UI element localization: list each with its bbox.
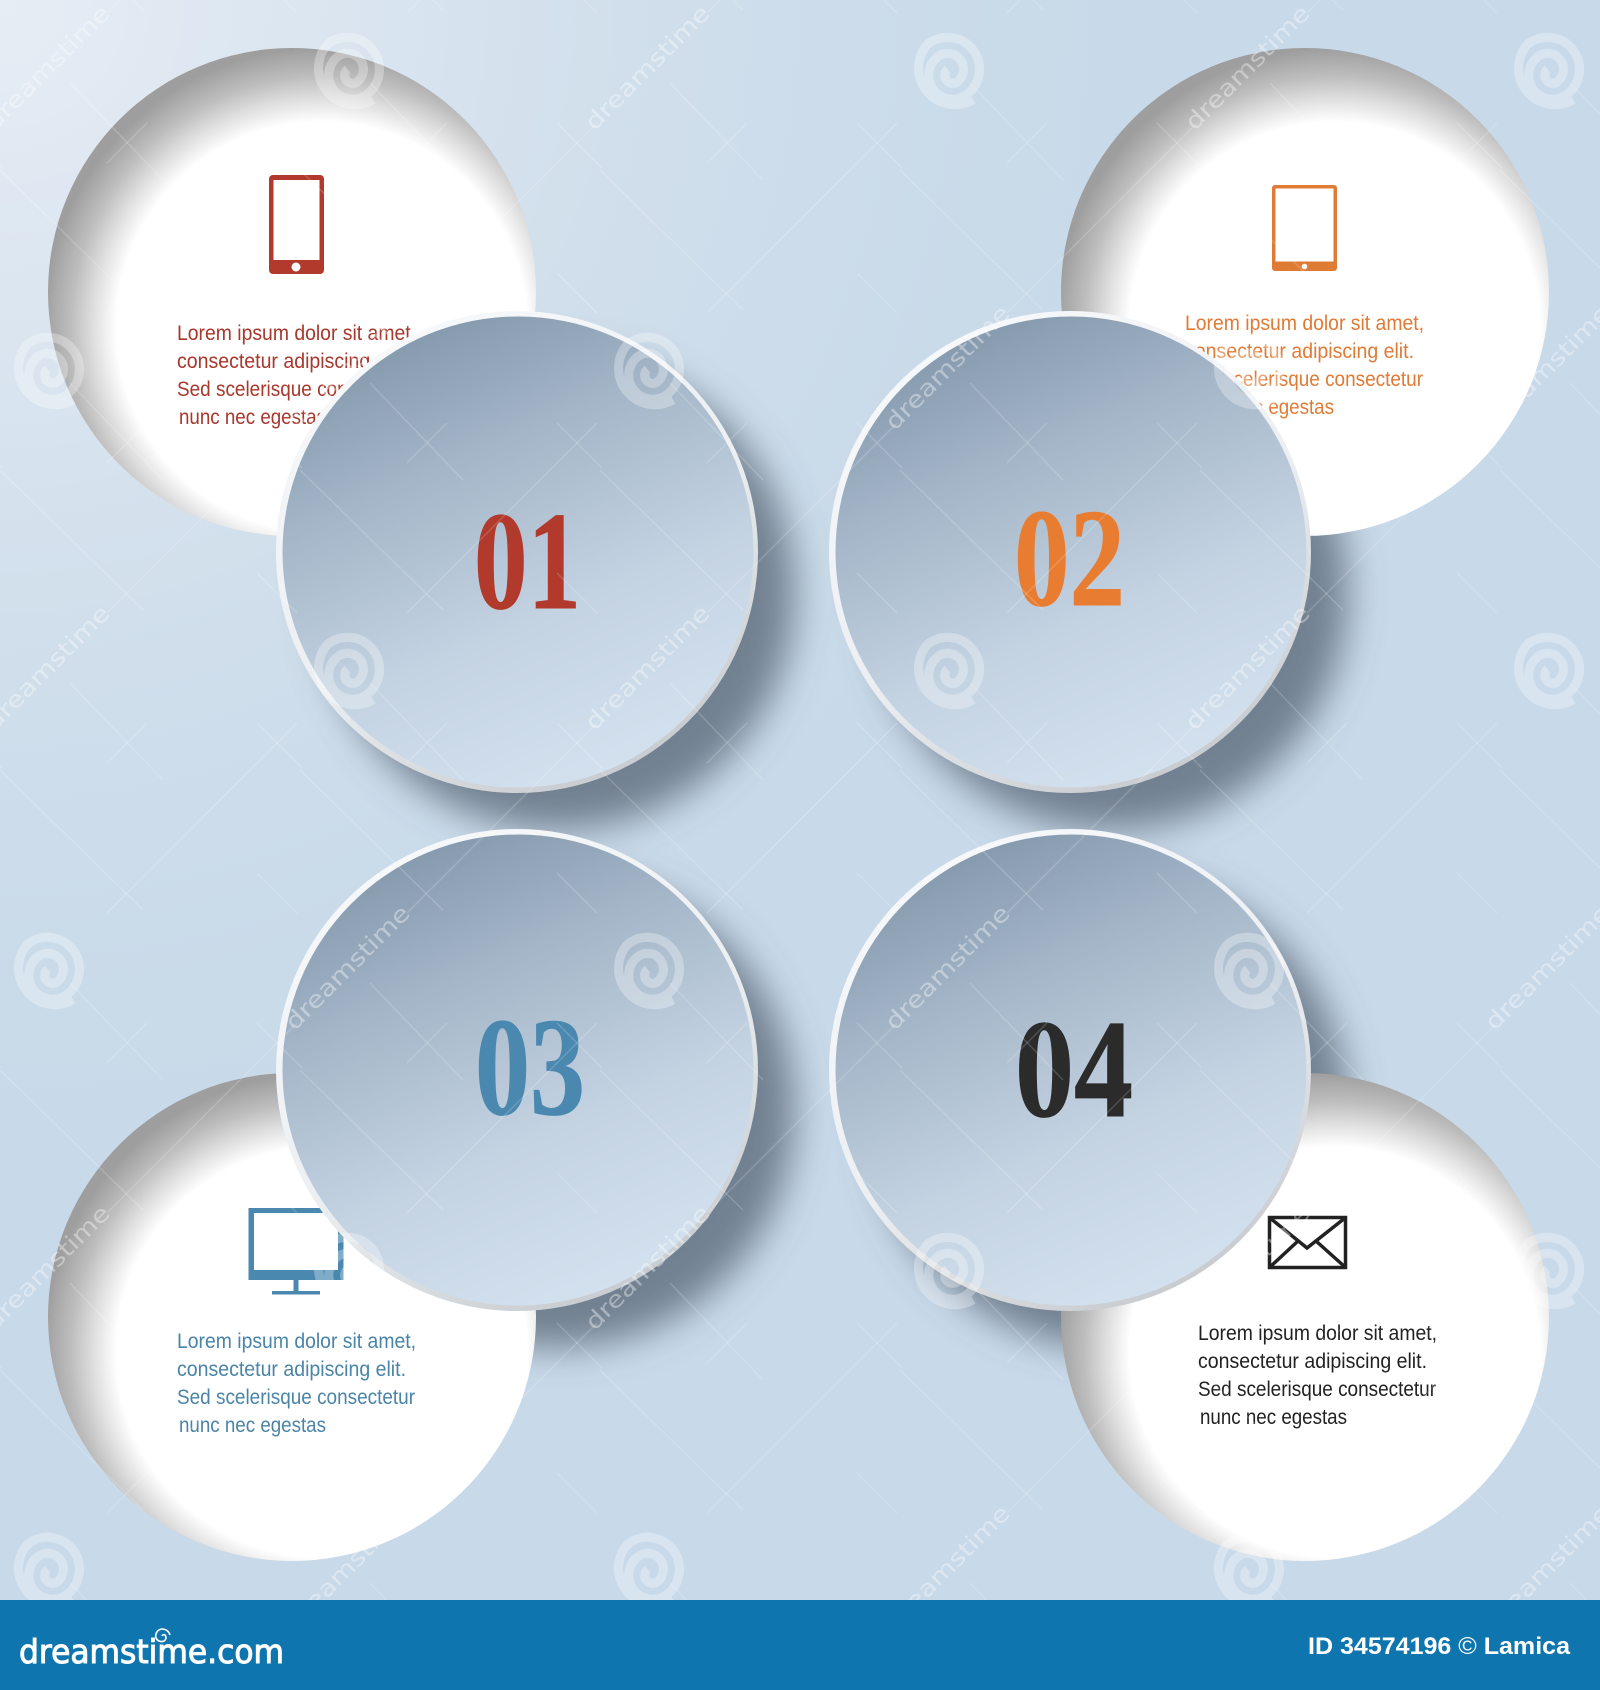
text block 01: nunc nec egestas (179, 406, 326, 429)
text block 01: Sed scelerisque consectetur (177, 378, 415, 401)
text block 02: Sed scelerisque consectetur (1185, 368, 1423, 391)
panel: disc 04 (829, 829, 1311, 1311)
text block 04: Sed scelerisque consectetur (1198, 1378, 1436, 1401)
icon: desktop monitor (248, 1208, 344, 1294)
number 03: 03 (475, 990, 585, 1145)
text block 03 (177, 1330, 416, 1437)
text block 02: nunc nec egestas (1187, 396, 1334, 419)
watermark overlay: dreamstime (1481, 301, 1600, 436)
text block 01: consectetur adipiscing elit. (177, 350, 406, 373)
watermark overlay: dreamstime (881, 1501, 1016, 1636)
icon: tablet (1272, 185, 1337, 271)
watermark overlay: dreamstime (281, 1501, 416, 1636)
text block 02 (1185, 312, 1424, 419)
disc drop shadows (319, 354, 1348, 1348)
text block 04: consectetur adipiscing elit. (1198, 1350, 1427, 1373)
watermark overlay: dreamstime (581, 1, 716, 136)
text block 03: Sed scelerisque consectetur (177, 1386, 415, 1409)
watermark overlay: dreamstime (281, 301, 416, 436)
panel: cut-out 02 (1061, 48, 1549, 536)
text block 04 (1198, 1322, 1437, 1429)
panel: cut-out 01 (48, 48, 536, 536)
text block 01 (177, 322, 416, 429)
watermark overlay: dreamstime (1481, 901, 1600, 1036)
icon: envelope (1270, 1218, 1346, 1268)
text block 03: nunc nec egestas (179, 1414, 326, 1437)
panel: cut-out 04 (1061, 1073, 1549, 1561)
text block 04: nunc nec egestas (1200, 1406, 1347, 1429)
watermark overlay: dreamstime (581, 601, 716, 736)
icon: smartphone (269, 175, 324, 274)
watermark overlay: dreamstime (1481, 1501, 1600, 1636)
footer bar (0, 1600, 1600, 1690)
watermark overlay: dreamstime (881, 901, 1016, 1036)
text block 01: Lorem ipsum dolor sit amet, (177, 322, 416, 345)
text block 03: consectetur adipiscing elit. (177, 1358, 406, 1381)
footer logo: dreamstime.com (19, 1632, 284, 1671)
panel: disc 03 (276, 829, 758, 1311)
text block 02: consectetur adipiscing elit. (1185, 340, 1414, 363)
panel: disc 01 (276, 311, 758, 793)
footer image id and credit: ID 34574196 © Lamica (1308, 1633, 1571, 1660)
text block 03: Lorem ipsum dolor sit amet, (177, 1330, 416, 1353)
number 01: 01 (474, 484, 581, 639)
text block 04: Lorem ipsum dolor sit amet, (1198, 1322, 1437, 1345)
watermark overlay: dreamstime (1181, 1201, 1316, 1336)
number 04: 04 (1015, 992, 1133, 1147)
panel: disc 02 (829, 311, 1311, 793)
panel: cut-out 03 (48, 1073, 536, 1561)
number 02: 02 (1014, 481, 1125, 636)
watermark overlay: dreamstime (281, 901, 416, 1036)
watermark overlay: dreamstime (881, 301, 1016, 436)
watermark overlay: dreamstime (1181, 1, 1316, 136)
text block 02: Lorem ipsum dolor sit amet, (1185, 312, 1424, 335)
watermark overlay: dreamstime (581, 1201, 716, 1336)
watermark overlay: dreamstime (1181, 601, 1316, 736)
